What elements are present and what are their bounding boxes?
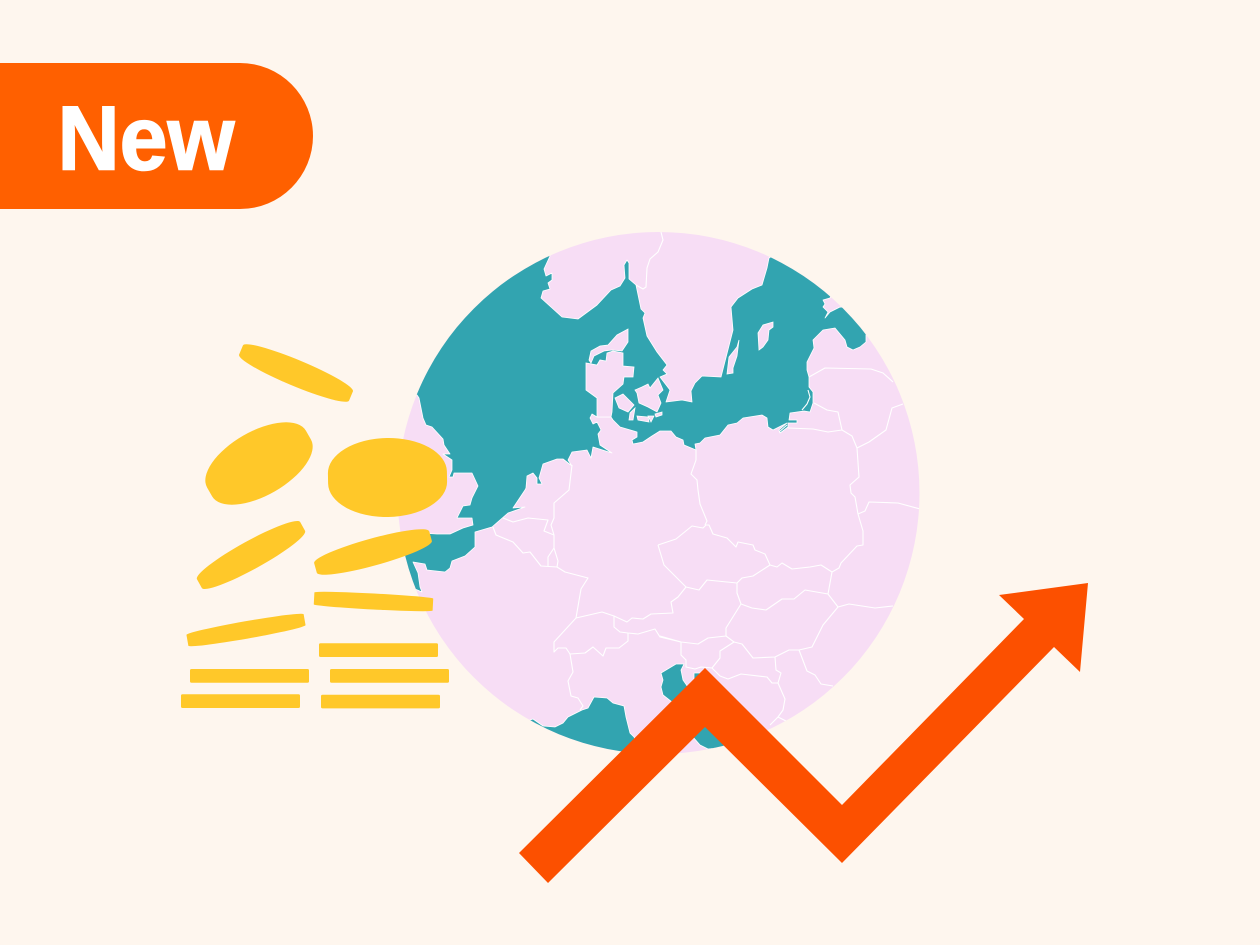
coin 10 — [330, 669, 449, 683]
badge: New — [0, 63, 313, 209]
badge label: New — [58, 88, 235, 190]
coin 3 — [327, 437, 448, 518]
coin 6 — [314, 590, 433, 613]
coin 12 — [321, 695, 440, 708]
islands and peninsulas — [586, 322, 773, 422]
coin 5 — [312, 523, 434, 581]
coin 4 — [193, 514, 309, 596]
coin 8 — [319, 643, 438, 657]
coin 2 — [194, 407, 324, 520]
country borders — [493, 232, 920, 725]
seas: North Sea, Baltic, Channel — [405, 256, 866, 592]
infographic canvas — [0, 63, 1088, 883]
sea: Adriatic — [660, 664, 724, 749]
coin 1 — [236, 338, 356, 408]
sea: Mediterranean — [530, 696, 635, 752]
coin 11 — [181, 694, 300, 708]
globe: map of Europe — [398, 232, 920, 753]
coin 9 — [190, 669, 309, 683]
arrow: rising trend — [519, 583, 1088, 883]
coins: falling stack — [181, 338, 449, 708]
coin 7 — [186, 611, 306, 649]
